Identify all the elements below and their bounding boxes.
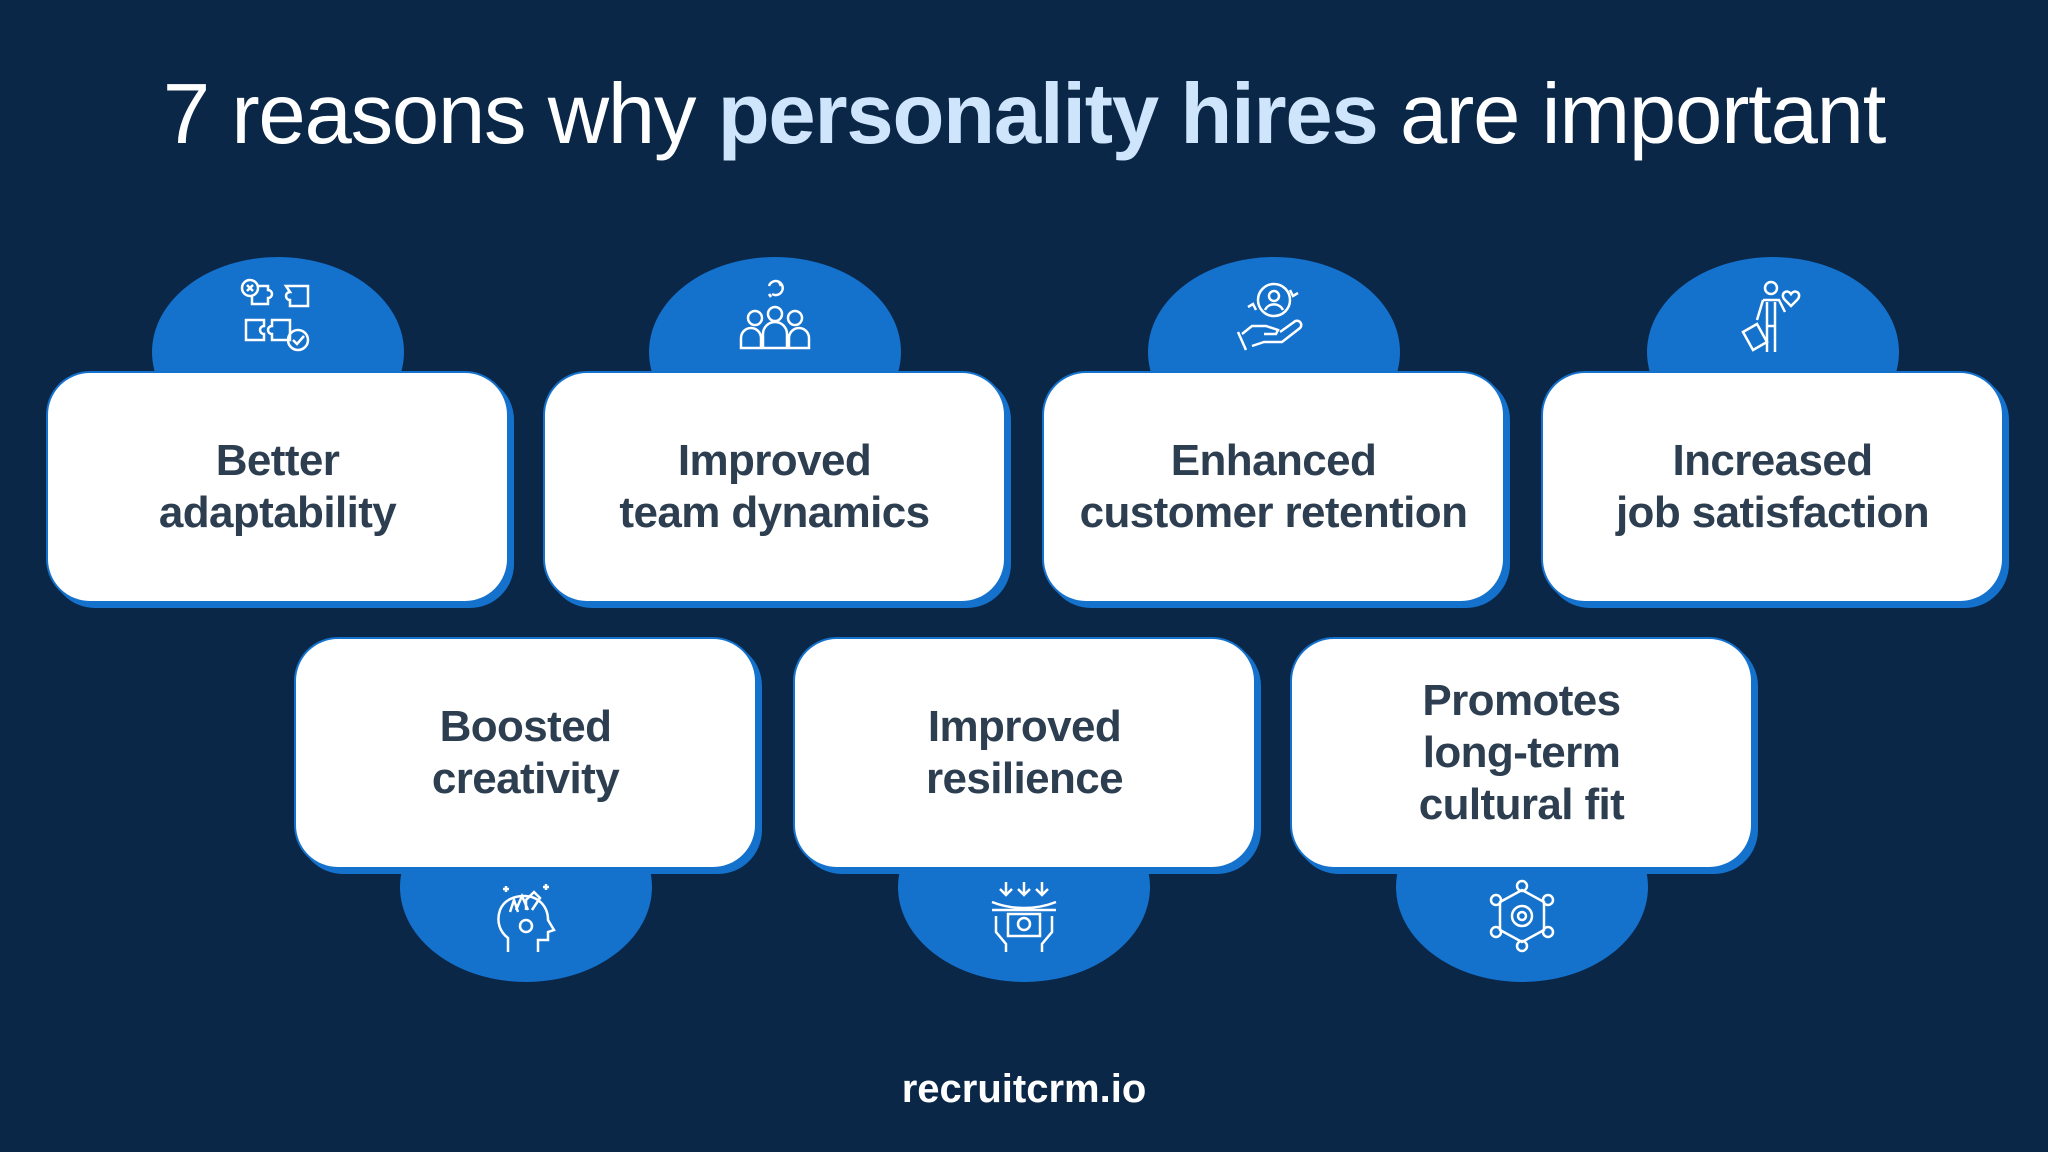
icon: network gear (1490, 880, 1554, 952)
ellipse: adaptability (152, 257, 404, 447)
card: improved resilience: Improved (928, 702, 1121, 751)
card: improved resilience (793, 637, 1256, 869)
card: long-term cultural fit: long-term (1423, 728, 1620, 777)
icon: creative head (497, 884, 556, 952)
ellipse: job satisfaction (1647, 257, 1899, 447)
icon: resilience (992, 882, 1056, 952)
title: 7 reasons why personality hires are important (163, 67, 1885, 162)
card: better adaptability (46, 371, 509, 603)
card: improved team dynamics: Improved (678, 436, 871, 485)
card: long-term cultural fit: cultural fit (1419, 780, 1624, 829)
icon: puzzle pieces (240, 278, 310, 352)
card: enhanced customer retention (1042, 371, 1505, 603)
card: increased job satisfaction: job satisfaction (1616, 488, 1929, 537)
card: improved resilience: resilience (926, 754, 1123, 803)
card: enhanced customer retention: customer retention (1080, 488, 1467, 537)
card: boosted creativity: Boosted (440, 702, 611, 751)
card: boosted creativity (294, 637, 757, 869)
card: long-term cultural fit: Promotes (1422, 676, 1621, 725)
card: boosted creativity: creativity (432, 754, 619, 803)
card: improved team dynamics: team dynamics (619, 488, 930, 537)
card: increased job satisfaction (1541, 371, 2004, 603)
card: long-term cultural fit (1290, 637, 1753, 869)
card: improved team dynamics (543, 371, 1006, 603)
ellipse: cultural fit (1396, 792, 1648, 982)
card: enhanced customer retention: Enhanced (1171, 436, 1376, 485)
ellipse: creativity (400, 792, 652, 982)
ellipse: customer retention (1148, 257, 1400, 447)
ellipse: team dynamics (649, 257, 901, 447)
card: better adaptability: Better (216, 436, 339, 485)
icon: team (740, 280, 810, 350)
card: increased job satisfaction: Increased (1672, 436, 1873, 485)
icon: hand with person (1236, 282, 1302, 350)
icon: person with heart (1741, 280, 1800, 352)
footer: brand: recruitcrm.io (902, 1067, 1146, 1111)
ellipse: resilience (898, 792, 1150, 982)
card: better adaptability: adaptability (159, 488, 396, 537)
